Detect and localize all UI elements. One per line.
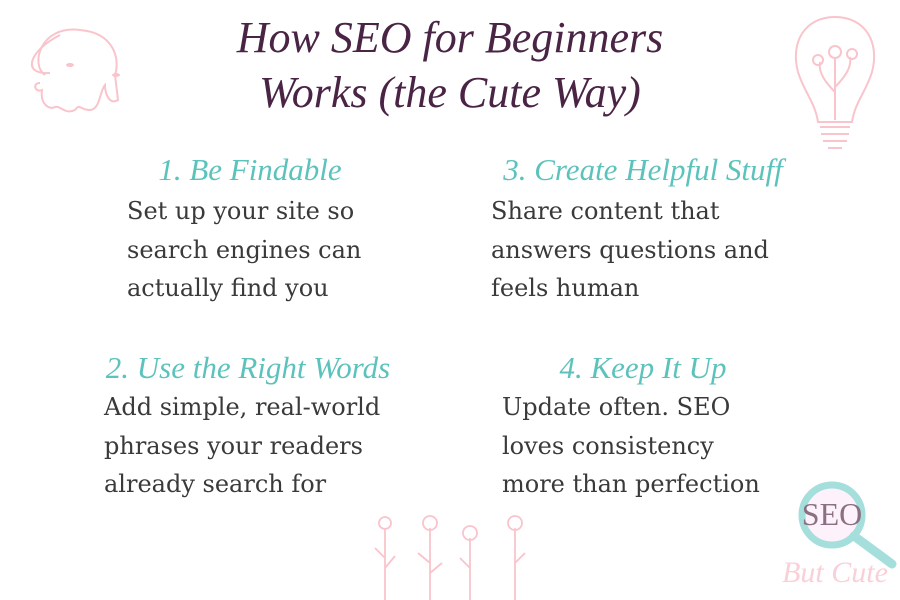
icon: lightbulb with flowers: [794, 16, 876, 149]
text block 3: [491, 197, 769, 302]
text block 4: loves consistency: [502, 432, 714, 460]
text block 2: [104, 393, 380, 498]
text block 4: Update often. SEO: [502, 393, 730, 421]
text block 1: Set up your site so: [127, 197, 354, 225]
logo: SEO But Cute: But Cute: [782, 556, 888, 589]
icon: flowers: [374, 515, 526, 600]
text block 1: actually find you: [127, 274, 329, 302]
text block 4: [502, 393, 760, 498]
text block 4: more than perfection: [502, 470, 760, 498]
text block 3: feels human: [491, 274, 639, 302]
heading 3: 3. Create Helpful Stuff: [503, 152, 783, 187]
logo: SEO But Cute: SEO: [802, 496, 862, 532]
text block 3: Share content that: [491, 197, 720, 225]
text block 2: already search for: [104, 470, 326, 498]
text block 3: answers questions and: [491, 236, 769, 264]
title: Works (the Cute Way): [259, 68, 641, 117]
text block 1: [127, 197, 361, 302]
text block 1: search engines can: [127, 236, 361, 264]
title: How SEO for Beginners: [237, 13, 663, 62]
text block 2: Add simple, real-world: [104, 393, 380, 421]
heading 2: 2. Use the Right Words: [106, 350, 390, 385]
title: [236, 13, 663, 117]
icon: bunny: [30, 28, 120, 112]
text block 2: phrases your readers: [104, 432, 363, 460]
heading 1: 1. Be Findable: [158, 152, 342, 187]
heading 4: 4. Keep It Up: [559, 350, 727, 385]
logo: SEO But Cute: [782, 482, 896, 589]
